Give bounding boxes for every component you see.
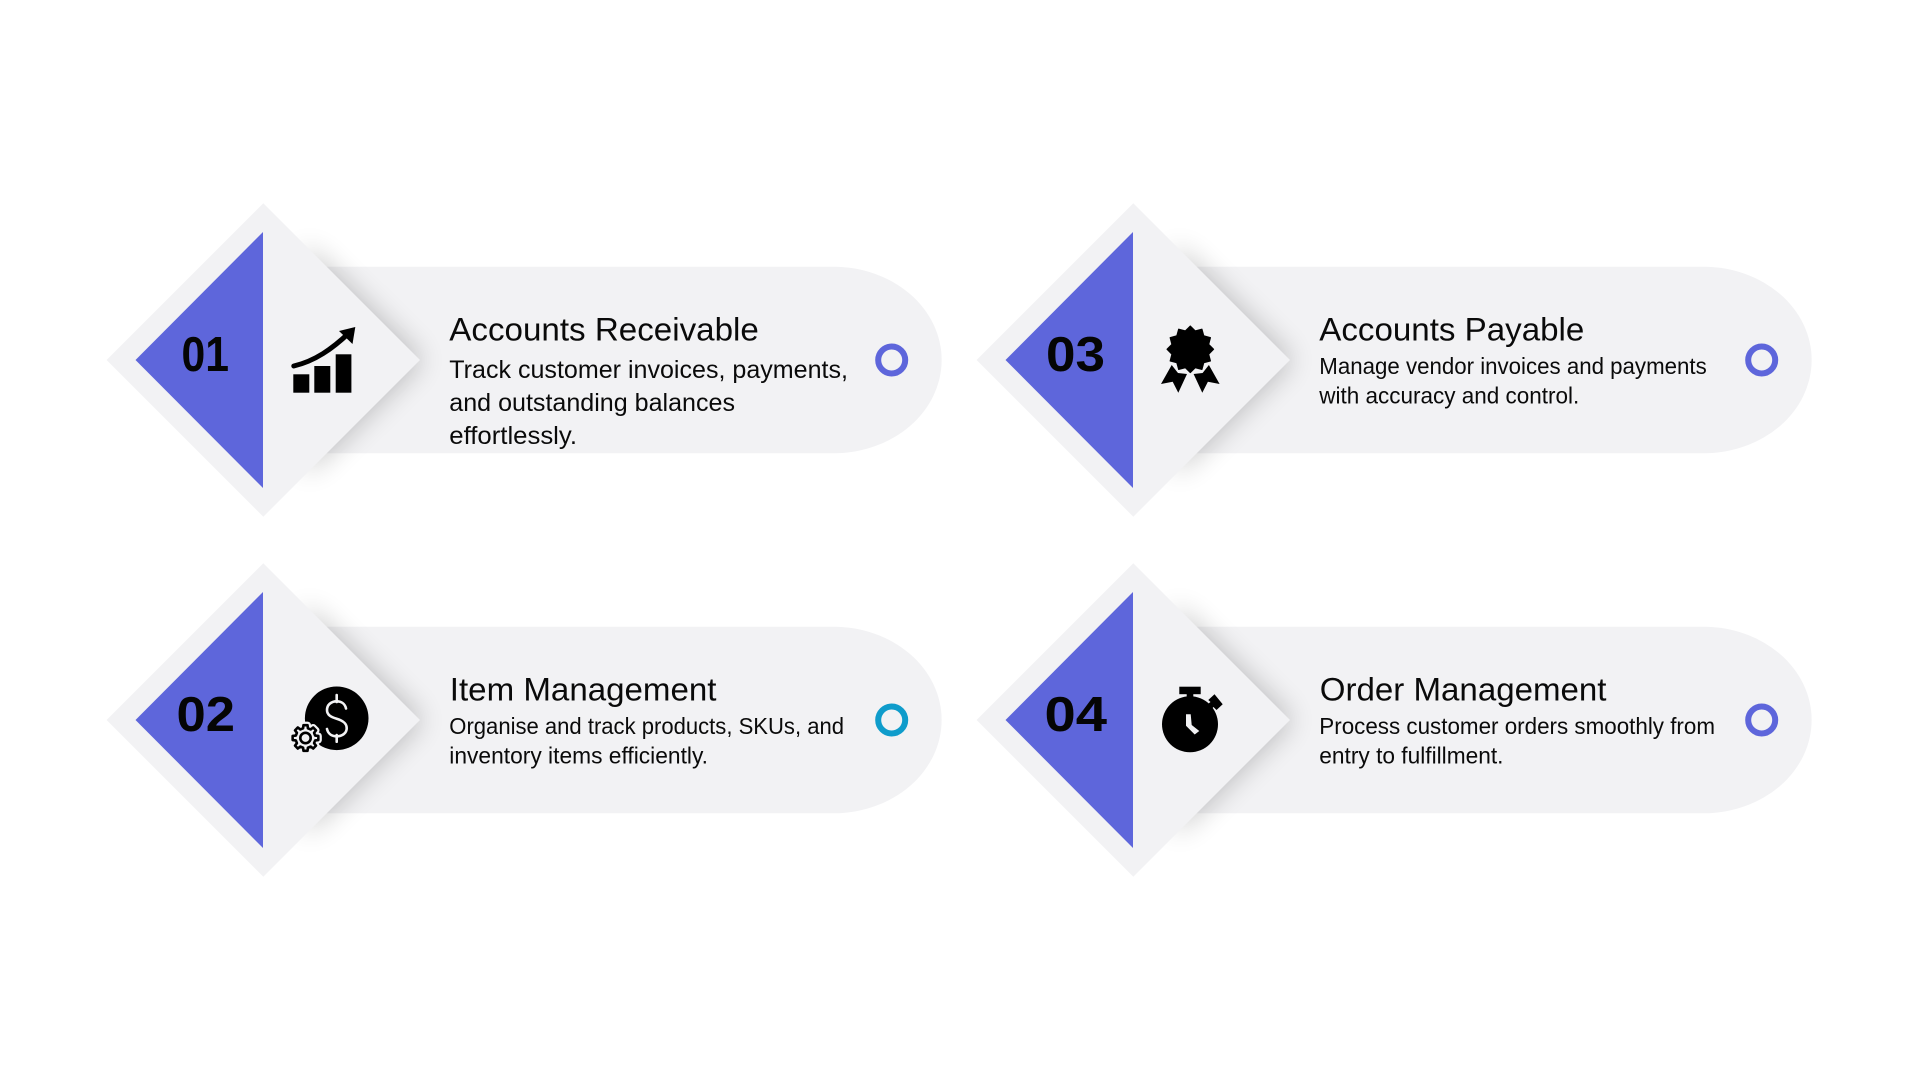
diamond shadow bbox=[305, 605, 422, 835]
number 01: 01 bbox=[182, 328, 229, 382]
accent triangle bbox=[1006, 232, 1133, 488]
description bbox=[449, 356, 848, 450]
icon: award rosette bbox=[1161, 326, 1220, 393]
description: Track customer invoices, payments, bbox=[449, 356, 848, 384]
icon: stopwatch bbox=[1162, 687, 1223, 752]
accent triangle bbox=[136, 592, 263, 848]
description: Organise and track products, SKUs, and bbox=[449, 713, 844, 739]
description: entry to fulfillment. bbox=[1319, 742, 1504, 768]
status ring bbox=[878, 706, 905, 734]
description bbox=[1318, 353, 1707, 408]
accent triangle bbox=[136, 232, 263, 488]
diamond bbox=[977, 203, 1290, 517]
description: Process customer orders smoothly from bbox=[1319, 713, 1715, 739]
status ring bbox=[878, 346, 905, 374]
panel: Order Management bbox=[977, 563, 1812, 877]
description: Manage vendor invoices and payments bbox=[1319, 353, 1707, 379]
icon: growth chart bbox=[293, 327, 355, 393]
panel: Accounts Payable bbox=[977, 203, 1812, 517]
heading: Order Management bbox=[1320, 672, 1607, 708]
number 03: 03 bbox=[1046, 328, 1105, 382]
pill background bbox=[263, 627, 942, 813]
heading: Accounts Receivable bbox=[449, 312, 759, 348]
heading: Accounts Payable bbox=[1319, 312, 1584, 348]
description bbox=[449, 713, 844, 768]
description: inventory items efficiently. bbox=[449, 742, 708, 768]
accent triangle bbox=[1006, 592, 1133, 848]
panel: Item Management bbox=[107, 563, 942, 877]
description: and outstanding balances bbox=[449, 389, 735, 417]
status ring bbox=[1748, 346, 1775, 374]
diamond shadow bbox=[1175, 245, 1292, 475]
pill background bbox=[1133, 267, 1812, 453]
pill background bbox=[1133, 627, 1812, 813]
number 04: 04 bbox=[1044, 688, 1107, 742]
description: with accuracy and control. bbox=[1318, 382, 1579, 408]
heading: Item Management bbox=[450, 672, 717, 708]
diamond bbox=[107, 203, 420, 517]
number 02: 02 bbox=[176, 688, 235, 742]
description: effortlessly. bbox=[449, 422, 577, 450]
description bbox=[1319, 713, 1715, 768]
status ring bbox=[1748, 706, 1775, 734]
diamond bbox=[977, 563, 1290, 877]
diamond bbox=[107, 563, 420, 877]
panel: Accounts Receivable bbox=[107, 203, 942, 517]
diamond shadow bbox=[305, 245, 422, 475]
pill background bbox=[263, 267, 942, 453]
icon: dollar coin with gear bbox=[293, 686, 369, 751]
diamond shadow bbox=[1175, 605, 1292, 835]
